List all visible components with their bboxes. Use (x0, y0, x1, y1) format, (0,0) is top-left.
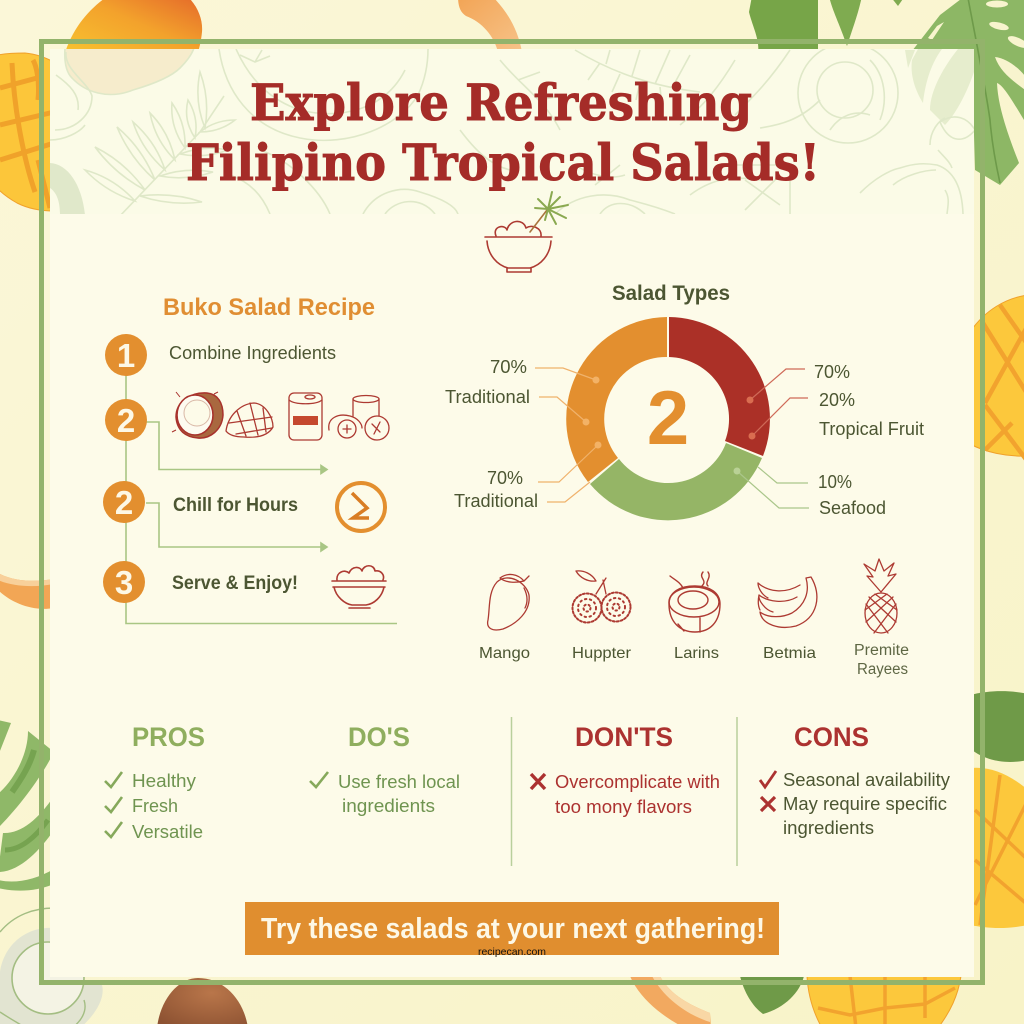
panel: pros (105, 722, 205, 842)
do's text: ingredients (342, 795, 435, 816)
coconut right (798, 43, 898, 143)
fruit: lychee: Huppter (572, 645, 632, 662)
melon slice left (0, 573, 54, 609)
don'ts text: too mony flavors (555, 796, 692, 817)
labels: left: 70% (487, 468, 523, 488)
website credit: recipecan.com (478, 946, 546, 958)
pros list: Healthy (132, 770, 197, 791)
cubed mango left (0, 53, 54, 211)
do's text (338, 771, 460, 816)
header line art pattern (50, 43, 975, 218)
chart heading: Salad Types (612, 282, 730, 305)
fruit: lychee (572, 571, 632, 662)
fruit: bananas: Betmia (763, 645, 816, 662)
green melon right (970, 691, 1024, 762)
panel: cons (760, 722, 951, 838)
cons check (760, 771, 776, 787)
cons text: Seasonal availability (783, 769, 951, 790)
don'ts cross (531, 774, 545, 789)
pros list: Fresh (132, 795, 178, 816)
step 1 badge (105, 334, 147, 376)
call to action banner (245, 902, 779, 955)
leaves left (0, 720, 54, 891)
do's heading: DO'S (348, 722, 410, 752)
header panel (50, 49, 974, 214)
icon: salad bowl with palm (485, 192, 568, 272)
step 3 badge (103, 561, 145, 603)
mango right lower (970, 768, 1024, 928)
cons heading: CONS (794, 722, 869, 752)
donut: tropical fruit segment (669, 317, 770, 456)
step 2 second badge: 2 (115, 484, 133, 521)
icon: timer (337, 483, 385, 531)
fruit: bananas (758, 577, 817, 662)
fruit: pineapple: Rayees (857, 661, 908, 678)
panel: fruit icon row (479, 559, 909, 678)
step text: serve: Serve & Enjoy! (172, 572, 298, 594)
fruit: pineapple (854, 559, 909, 678)
labels: left: Traditional (454, 491, 538, 511)
lower fruits (363, 189, 458, 214)
content panel (50, 214, 974, 977)
do's check (310, 772, 328, 787)
large arcs behind title (219, 49, 428, 140)
leader dots (582, 376, 756, 474)
step 1 badge: 1 (117, 337, 135, 374)
donut center value: 2 (647, 376, 689, 461)
faded avocado (50, 163, 85, 215)
pros heading: PROS (132, 722, 205, 752)
mango bottom (807, 976, 961, 1024)
pros checks (105, 772, 122, 837)
timeline connectors (126, 355, 397, 624)
title (186, 73, 820, 192)
fruit: coconut: Larins (674, 645, 719, 662)
recipe heading: Buko Salad Recipe (163, 294, 375, 321)
top palm leaves (749, 0, 905, 52)
pros list (132, 770, 203, 842)
fruit: mango: Mango (479, 645, 530, 662)
fruit: coconut (669, 572, 720, 662)
coconut bottom left (0, 908, 103, 1024)
icon: coconut half (172, 392, 223, 438)
labels: right: 20% (819, 390, 855, 410)
do's text: Use fresh local (338, 771, 460, 792)
cons text (783, 769, 951, 838)
labels: left: Traditional (445, 387, 530, 407)
labels: left (445, 357, 538, 511)
faded mango (65, 48, 194, 94)
labels: right: Seafood (819, 498, 886, 518)
cons text: May require specific (783, 793, 947, 814)
green leaf bottom (740, 976, 804, 1014)
step text: combine: Combine Ingredients (169, 343, 336, 363)
icon: canned fruit cluster (329, 396, 389, 440)
panel: salad types donut chart (445, 282, 924, 520)
donut: traditional segment (566, 317, 667, 482)
labels: right: Tropical Fruit (819, 419, 924, 439)
melon slice top (458, 0, 522, 52)
labels: right: 10% (818, 472, 852, 492)
melon slice bottom (630, 976, 711, 1024)
title: Explore Refreshing (250, 73, 752, 132)
labels: right (814, 362, 924, 518)
faded monstera (905, 49, 974, 125)
brown coconut bottom (157, 978, 248, 1024)
panel: don'ts (531, 722, 720, 817)
step 2 badge: 2 (117, 402, 135, 439)
cons text: ingredients (783, 817, 874, 838)
call to action banner: Try these salads at your next gathering! (261, 913, 765, 945)
don'ts text (555, 771, 720, 817)
donut: seafood segment (590, 443, 762, 520)
icon: serving bowl (332, 566, 386, 608)
labels: left: 70% (490, 357, 527, 377)
icon: tin can (289, 393, 322, 440)
don'ts text: Overcomplicate with (555, 771, 720, 792)
palm frond (85, 72, 235, 218)
small coconut (50, 52, 92, 140)
mango right (860, 164, 963, 214)
step 2 badge (105, 399, 147, 441)
leader lines (535, 368, 809, 508)
pros list: Versatile (132, 821, 203, 842)
monstera leaf right (905, 0, 1024, 185)
fruit: pineapple: Premite (854, 642, 909, 659)
mango right upper (970, 295, 1024, 462)
step 3 badge: 3 (115, 564, 133, 601)
column dividers (512, 717, 737, 866)
cons cross (761, 797, 775, 811)
panel: Buko salad recipe (103, 294, 397, 624)
panel: do's (310, 722, 460, 816)
title: Filipino Tropical Salads! (186, 133, 820, 192)
step 2 second badge (103, 481, 145, 523)
labels: right: 70% (814, 362, 850, 382)
central frond (575, 50, 700, 106)
don'ts heading: DON'TS (575, 722, 673, 752)
step text: chill: Chill for Hours (173, 494, 298, 516)
fruit: mango (479, 574, 530, 662)
icon: cubed mango (226, 403, 273, 437)
mango top left (64, 0, 202, 58)
